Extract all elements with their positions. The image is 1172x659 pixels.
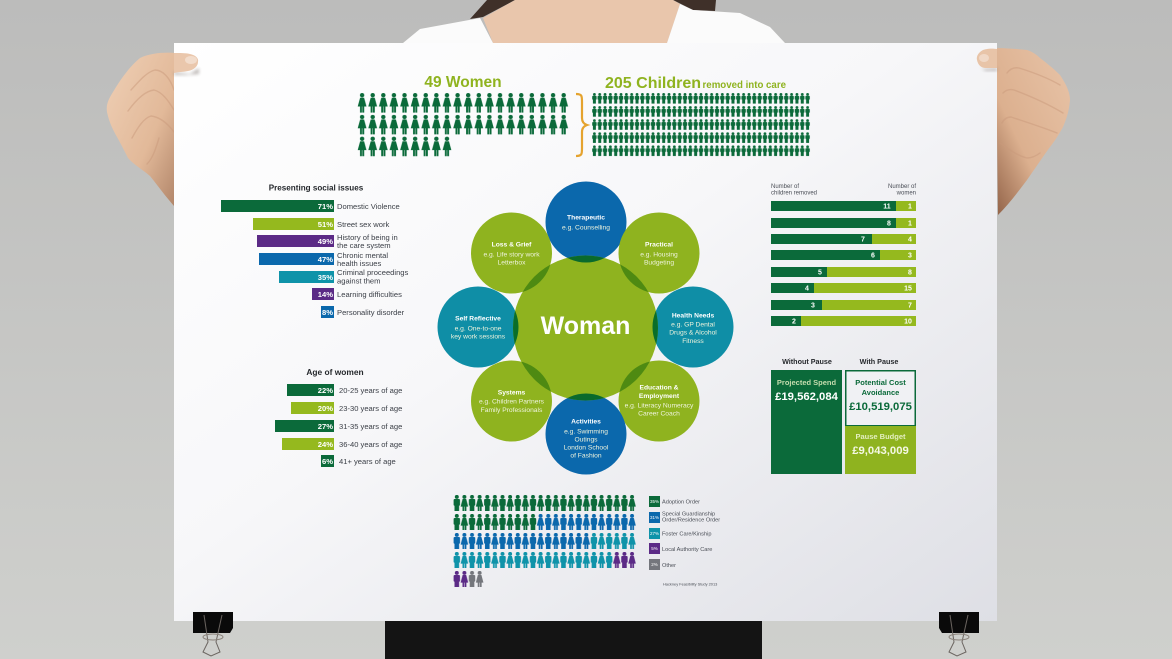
circle text: activities: of Fashion: [570, 452, 602, 460]
pictogram: 49 women: [358, 93, 570, 157]
box: pause budget: Pause Budget: [855, 432, 906, 441]
chart: children removed per woman: 8: [908, 270, 912, 276]
legend: outcomes: Local Authority Care: [662, 547, 712, 553]
header: number of children removed: Number of: [771, 184, 799, 190]
panel: presenting social issues: History of being in: [337, 233, 398, 242]
legend: outcomes: Special Guardianship: [662, 512, 715, 518]
icon: right binder clip: [939, 612, 979, 656]
circle text: loss and grief: e.g. Life story work: [483, 252, 540, 258]
chart: children removed per woman: 7: [861, 236, 865, 244]
panel: presenting social issues: Chronic mental: [337, 251, 388, 260]
legend: outcomes: Adoption Order: [662, 500, 700, 506]
circle text: education and employment: Employment: [639, 393, 680, 400]
box: potential cost avoidance: £10,519,075: [849, 401, 912, 413]
pictogram: outcomes for children: [453, 495, 636, 587]
heading: 49 women: 49 Women: [424, 74, 502, 91]
panel: age of women: 36-40 years of age: [339, 440, 402, 449]
circle text: education and employment: Education &: [639, 384, 679, 392]
circle text: systems: e.g. Children Partners: [479, 398, 545, 406]
legend: outcomes: Foster Care/Kinship: [662, 532, 711, 538]
icon: right hand: [990, 48, 1070, 215]
panel: presenting social issues: Personality disorder: [337, 308, 405, 317]
legend: outcomes: [649, 496, 720, 570]
icon: left binder clip: [193, 612, 233, 656]
circle text: health needs: [669, 312, 717, 345]
panel: presenting social issues: 35%: [318, 273, 333, 282]
circle text: health needs: e.g. GP Dental: [671, 322, 715, 328]
panel: presenting social issues: Domestic Violence: [337, 202, 400, 211]
panel: presenting social issues: 8%: [322, 308, 333, 317]
circle text: activities: Activities: [571, 418, 601, 426]
panel: cost comparison: [771, 357, 916, 474]
circle text: practical: [640, 242, 678, 266]
panel: presenting social issues: 49%: [318, 237, 333, 246]
panel: presenting social issues: against them: [337, 276, 380, 286]
legend: outcomes: 5%: [651, 546, 658, 551]
legend: outcomes: 2%: [651, 562, 658, 567]
panel: presenting social issues: Street sex work: [337, 220, 390, 229]
legend: outcomes: 35%: [650, 499, 659, 504]
panel: presenting social issues: [221, 184, 409, 318]
chart: children removed per woman: 3: [811, 302, 815, 310]
circle text: systems: [479, 390, 545, 414]
legend: outcomes: 31%: [650, 515, 659, 520]
legend: outcomes: Order/Residence Order: [662, 518, 720, 524]
circle text: activities: [564, 418, 609, 460]
circle text: health needs: Drugs & Alcohol: [669, 330, 717, 336]
icon: left hand thumb: [174, 53, 199, 75]
chart: children removed per woman: 6: [871, 252, 875, 260]
header: number of women: women: [896, 190, 916, 196]
chart: children removed per woman: 15: [904, 286, 912, 292]
box: pause budget: [845, 426, 916, 474]
chart: children removed per woman: 7: [908, 302, 912, 310]
chart: children removed per woman: 4: [908, 236, 912, 244]
header: number of children removed: children removed: [771, 190, 817, 196]
panel: age of women: 6%: [322, 457, 333, 466]
chart: children removed per woman: 5: [818, 270, 822, 276]
legend: outcomes: 27%: [650, 531, 659, 536]
circle text: loss and grief: Loss & Grief: [492, 242, 532, 248]
circle text: loss and grief: Letterbox: [498, 260, 526, 266]
heading: without pause: Without Pause: [782, 357, 832, 366]
panel: presenting social issues: 51%: [318, 220, 333, 229]
panel: age of women: 23-30 years of age: [339, 404, 402, 413]
pictogram: 205 children: [592, 93, 810, 156]
box: projected spend: Projected Spend: [777, 378, 837, 387]
heading: presenting social issues: Presenting social issues: [269, 184, 364, 192]
box: projected spend: £19,562,084: [775, 391, 839, 403]
legend: outcomes: Other: [662, 563, 676, 569]
poster sheet: [174, 43, 997, 621]
icon: right hand thumb: [977, 49, 997, 71]
box: projected spend: [771, 370, 842, 474]
brace: [576, 94, 587, 156]
panel: presenting social issues: Criminal proceedings: [337, 268, 409, 277]
circle text: activities: Outings: [574, 436, 598, 444]
circle text: activities: e.g. Swimming: [564, 428, 608, 436]
person behind poster: [385, 0, 785, 659]
circle text: practical: e.g. Housing: [640, 252, 678, 258]
panel: age of women: 20-25 years of age: [339, 386, 402, 395]
circle text: therapeutic: Therapeutic: [567, 214, 605, 222]
circle text: loss and grief: [483, 242, 540, 266]
circle text: therapeutic: [562, 214, 610, 232]
chart: children removed per woman: 10: [904, 318, 912, 326]
heading: woman: Woman: [541, 312, 630, 340]
panel: presenting social issues: 14%: [318, 290, 333, 299]
chart: children removed per woman: 1: [908, 220, 912, 228]
chart: children removed per woman: 3: [908, 252, 912, 260]
circle text: self reflective: Self Reflective: [455, 316, 501, 322]
chart: children removed per woman: [771, 184, 916, 326]
panel: age of women: 22%: [318, 386, 333, 395]
circle text: practical: Budgeting: [644, 260, 674, 266]
circle text: therapeutic: e.g. Counselling: [562, 224, 610, 232]
circle text: self reflective: [451, 316, 506, 340]
circle text: health needs: Health Needs: [672, 312, 714, 320]
heading: 205 children: 205 Childrenremoved into care: [605, 75, 787, 92]
panel: presenting social issues: health issues: [337, 259, 382, 268]
panel: age of women: 27%: [318, 422, 333, 431]
box: potential cost avoidance: Avoidance: [862, 388, 899, 397]
chart: children removed per woman: 11: [883, 204, 891, 210]
panel: age of women: [275, 367, 402, 467]
heading: with pause: With Pause: [860, 357, 898, 366]
panel: age of women: 41+ years of age: [339, 457, 396, 466]
circle text: self reflective: key work sessions: [451, 334, 506, 340]
panel: age of women: 20%: [318, 404, 333, 413]
panel: presenting social issues: Learning difficulties: [337, 290, 402, 299]
circle text: education and employment: [625, 384, 694, 418]
panel: presenting social issues: 47%: [318, 255, 333, 264]
circle text: health needs: Fitness: [682, 338, 704, 345]
circle text: systems: Family Professionals: [481, 407, 543, 414]
box: pause budget: £9,043,009: [852, 445, 909, 457]
panel: presenting social issues: 71%: [318, 202, 333, 211]
icon: left hand: [107, 53, 176, 206]
diagram: woman and support circles: [438, 182, 734, 474]
circle text: education and employment: Career Coach: [638, 410, 680, 418]
chart: children removed per woman: 8: [887, 220, 891, 228]
source note: Hackney Feasibility Study 2013: [663, 582, 717, 586]
circle text: practical: Practical: [645, 242, 673, 248]
panel: age of women: 31-35 years of age: [339, 422, 402, 431]
circle text: self reflective: e.g. One-to-one: [455, 326, 502, 332]
chart: children removed per woman: 1: [908, 204, 912, 210]
box: potential cost avoidance: [846, 371, 915, 426]
box: potential cost avoidance: Potential Cost: [855, 378, 906, 387]
circle text: activities: London School: [564, 444, 609, 452]
panel: presenting social issues: the care system: [337, 241, 391, 250]
chart: children removed per woman: 4: [805, 286, 809, 292]
header: number of women: Number of: [888, 184, 916, 190]
chart: children removed per woman: 2: [792, 318, 796, 326]
panel: age of women: 24%: [318, 440, 333, 449]
heading: age of women: Age of women: [306, 367, 364, 377]
circle text: education and employment: e.g. Literacy Numeracy: [625, 402, 694, 410]
circle text: systems: Systems: [498, 390, 526, 396]
